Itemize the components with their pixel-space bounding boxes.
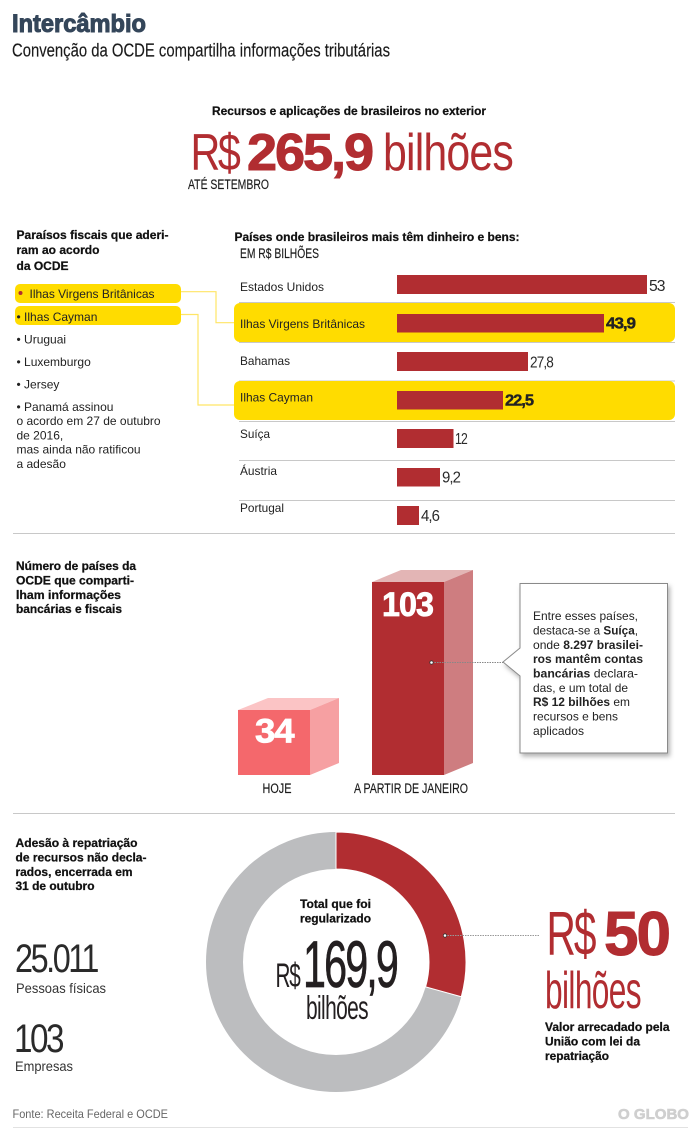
chart heading: Países onde brasileiros mais têm dinheiro e bens: — [234, 230, 520, 244]
row: Suíça: 12 — [455, 431, 468, 448]
havens list text — [16, 287, 161, 471]
headline figure: R$ — [190, 124, 241, 182]
row: Estados Unidos: Estados Unidos — [240, 280, 324, 294]
donut chart — [224, 832, 466, 1074]
headline figure: bilhões — [383, 124, 513, 182]
highlight row: Ilhas Virgens Britânicas — [234, 303, 675, 342]
logo: O Globo: O GLOBO — [618, 1106, 689, 1123]
headline figure: 265,9 — [247, 124, 372, 182]
row: Ilhas Cayman: 22,5 — [505, 392, 534, 410]
row: Portugal — [240, 501, 440, 525]
OECD heading: lham informações — [16, 590, 121, 602]
chart unit: EM R$ BILHÕES — [240, 245, 319, 261]
tax havens heading: Paraísos fiscais que aderi- — [16, 228, 169, 242]
label: A PARTIR DE JANEIRO: A PARTIR DE JANEIRO — [354, 781, 468, 796]
panel: OECD countries count — [16, 561, 668, 796]
callout caption: União com lei da — [545, 1036, 641, 1048]
3D bar: 103 from January: 103 — [382, 586, 433, 624]
headline total — [188, 104, 513, 192]
havens list text: de 2016, — [16, 428, 63, 442]
tax havens heading: da OCDE — [16, 259, 68, 273]
highlight row: Ilhas Cayman — [234, 381, 675, 420]
donut center value: R$ — [276, 957, 301, 995]
stat: 25.011 individuals — [15, 937, 106, 996]
repatriation heading: Adesão à repatriação — [16, 838, 138, 850]
stat: 25.011 individuals: 25.011 — [15, 937, 98, 981]
callout caption — [545, 1022, 670, 1063]
panel: repatriation — [14, 832, 670, 1074]
title: Intercâmbio — [12, 10, 146, 38]
source: Fonte: Receita Federal e OCDE — [12, 1107, 168, 1121]
highlight: Ilhas Cayman — [15, 306, 181, 325]
R$ 50 billion callout — [545, 900, 670, 1063]
donut center label: Total que foi — [300, 897, 371, 911]
havens list text: • Ilhas Cayman — [16, 310, 97, 324]
3D bar: 103 from January — [372, 570, 473, 775]
row: Suíça — [240, 427, 468, 448]
callout: Suíça: aplicados — [533, 724, 584, 738]
tax havens heading — [16, 228, 169, 273]
R$ 50 billion callout: R$ — [546, 900, 596, 969]
3D bar: 34 today — [238, 698, 339, 775]
havens list text: o acordo em 27 de outubro — [16, 414, 161, 428]
callout: Suíça — [430, 584, 668, 753]
row: Ilhas Virgens Britânicas: Ilhas Virgens Britânicas — [240, 317, 365, 331]
row: Estados Unidos: 53 — [649, 278, 666, 295]
row: Ilhas Virgens Britânicas — [240, 314, 636, 332]
connector: Ilhas Cayman — [181, 314, 234, 405]
R$ 50 billion callout: bilhões — [545, 962, 641, 1020]
panel: countries bar chart — [234, 230, 675, 525]
stat: 103 companies: Empresas — [15, 1058, 73, 1074]
repatriation heading — [16, 838, 147, 893]
highlight: Ilhas Virgens Britânicas — [15, 284, 181, 303]
OECD heading: OCDE que comparti- — [16, 576, 134, 588]
row: Estados Unidos — [240, 275, 666, 295]
row: Ilhas Cayman: Ilhas Cayman — [240, 390, 313, 404]
donut chart: bilhões — [306, 989, 368, 1026]
donut chart: regularizado — [300, 912, 371, 926]
OECD heading — [16, 561, 137, 616]
panel: tax havens list — [15, 228, 181, 471]
row: Áustria: 9,2 — [442, 470, 461, 486]
tax havens heading: ram ao acordo — [16, 243, 100, 257]
havens list text: • Jersey — [16, 378, 59, 392]
row: Ilhas Cayman — [240, 390, 534, 410]
repatriation heading: rados, encerrada em — [16, 867, 132, 879]
havens list text: a adesão — [16, 457, 66, 471]
row: Bahamas — [240, 352, 554, 372]
callout: Suíça: ros mantêm contas — [533, 652, 643, 666]
OECD heading: bancárias e fiscais — [16, 604, 122, 616]
havens list text: • Uruguai — [16, 332, 66, 346]
callout caption: Valor arrecadado pela — [545, 1022, 670, 1034]
3D bar: 34 today: 34 — [255, 712, 295, 750]
subtitle: Convenção da OCDE compartilha informações tributárias — [12, 40, 390, 60]
OECD heading: Número de países da — [16, 561, 137, 573]
row: Áustria: Áustria — [240, 463, 277, 478]
callout: Suíça: bancárias declara- — [533, 666, 638, 680]
row: Portugal: Portugal — [240, 501, 284, 515]
donut chart: 169,9 — [303, 927, 397, 1001]
row: Áustria — [240, 463, 461, 486]
callout: Suíça: das, e um total de — [533, 681, 628, 695]
label: HOJE: HOJE — [262, 781, 292, 796]
stat: 25.011 individuals: Pessoas físicas — [16, 980, 106, 996]
row: Bahamas: Bahamas — [240, 354, 290, 368]
callout caption: repatriação — [545, 1051, 609, 1063]
callout: Suíça: Entre esses países, — [533, 609, 638, 623]
row: Bahamas: 27,8 — [530, 354, 554, 372]
headline figure — [190, 124, 513, 182]
havens list text: • Luxemburgo — [16, 355, 91, 369]
row: Portugal: 4,6 — [421, 508, 440, 525]
leader line — [443, 934, 539, 937]
connector: Ilhas Virgens Britânicas — [181, 292, 234, 323]
R$ 50 billion callout: 50 — [604, 900, 669, 969]
repatriation heading: 31 de outubro — [16, 881, 94, 893]
row: Ilhas Virgens Britânicas: 43,9 — [606, 316, 636, 332]
headline date note: ATÉ SETEMBRO — [188, 177, 269, 192]
repatriation heading: de recursos não decla- — [16, 852, 147, 864]
row: Suíça: Suíça — [240, 427, 270, 441]
havens list text: Ilhas Virgens Britânicas — [30, 287, 154, 301]
callout: Suíça: onde 8.297 brasilei- — [533, 638, 643, 652]
callout: Suíça: destaca-se a Suíça, — [533, 624, 638, 638]
headline label: Recursos e aplicações de brasileiros no exterior — [212, 104, 486, 118]
havens list text: mas ainda não ratificou — [16, 442, 141, 456]
callout: Suíça: recursos e bens — [533, 710, 618, 724]
stat: 103 companies: 103 — [14, 1017, 63, 1061]
havens list text: • Panamá assinou — [16, 400, 113, 414]
callout: Suíça: R$ 12 bilhões em — [533, 695, 630, 709]
